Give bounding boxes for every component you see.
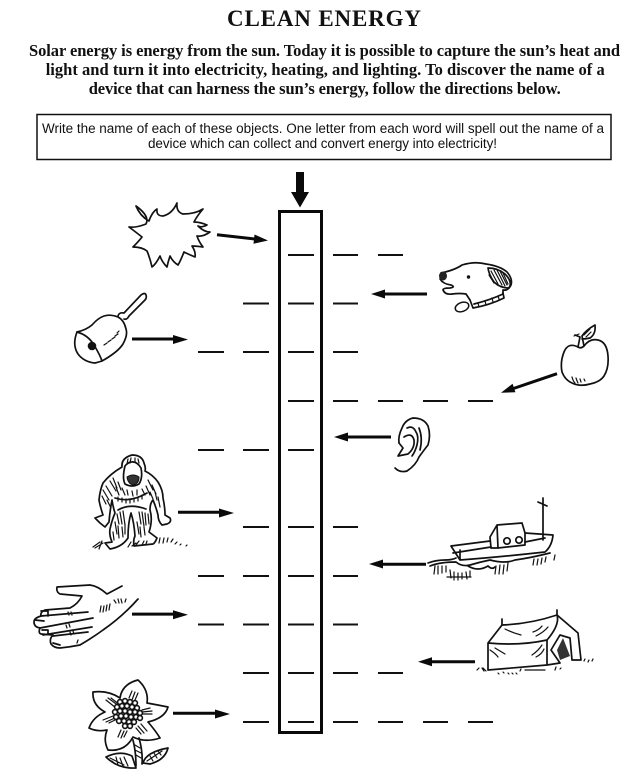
arrow: boat to column: [369, 560, 426, 568]
icon: boat: [428, 498, 555, 580]
letter blanks: ear: [198, 449, 314, 451]
letter blanks: dog: [243, 302, 358, 304]
intro text block: device that can harness the sun’s energy, follow the directions below.: [89, 79, 561, 98]
letter blanks: flower: [243, 721, 493, 723]
icon: sun: [129, 203, 210, 267]
letter blanks: gorilla: [243, 526, 358, 528]
arrow: flower to column: [173, 710, 230, 718]
arrow: hand to blanks: [132, 610, 188, 619]
instructions box: Write the name of each of these objects. One letter from each word will spell out the name of a: [42, 121, 604, 136]
title: CLEAN ENERGY: [227, 6, 421, 31]
letter blanks: boat: [198, 575, 358, 577]
letter blanks: tent: [243, 672, 403, 674]
icon: tent: [477, 610, 593, 674]
letter blanks: apple: [288, 400, 493, 402]
letter blanks: hand: [198, 624, 358, 626]
icon: apple: [561, 325, 608, 385]
arrow: apple to blanks: [501, 374, 557, 393]
arrow: tent to column: [418, 657, 475, 666]
icon: bell: [75, 294, 146, 363]
intro text block: [29, 41, 620, 98]
arrow: dog to column: [371, 290, 427, 298]
arrow: sun to column: [217, 234, 268, 244]
letter blanks: bell: [198, 351, 358, 353]
letter blanks: sun: [288, 254, 403, 256]
icon: gorilla: [93, 455, 187, 549]
arrow: bell to blanks: [132, 335, 188, 344]
instructions box: device which can collect and convert energy into electricity!: [148, 136, 497, 151]
arrow: ear to column: [334, 432, 391, 442]
icon: hand: [34, 585, 138, 648]
icon: dog: [439, 263, 512, 314]
icon: ear: [395, 418, 430, 472]
arrow: down into answer column: [291, 172, 309, 208]
instructions box: [37, 114, 611, 160]
arrow: gorilla to column: [178, 508, 234, 518]
answer column: [280, 212, 322, 732]
intro text block: Solar energy is energy from the sun. Today it is possible to capture the sun’s heat and: [29, 41, 620, 60]
icon: flower: [89, 680, 168, 768]
intro text block: light and turn it into electricity, heating, and lighting. To discover the name of a: [46, 60, 605, 79]
